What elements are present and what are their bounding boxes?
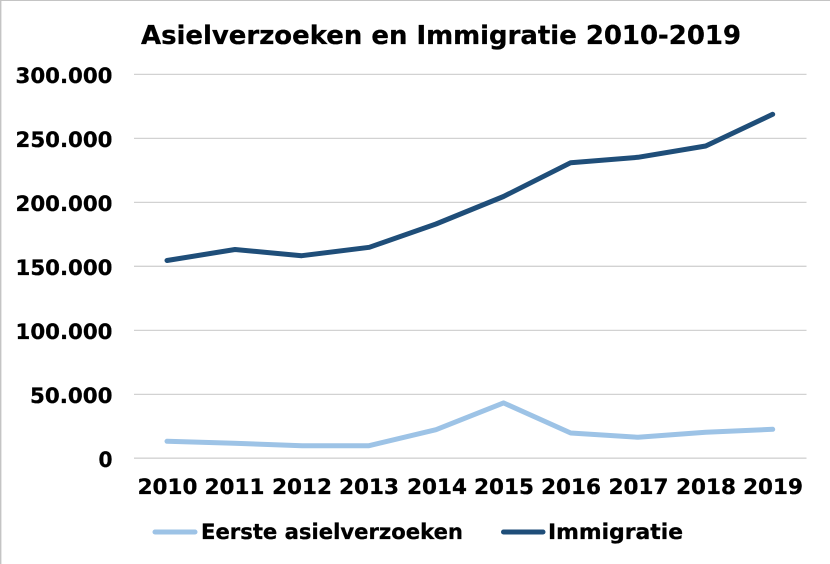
y axis labels [16, 64, 112, 473]
y axis labels: 200.000 [16, 192, 112, 217]
y axis labels: 50.000 [30, 384, 112, 409]
legend: Eerste asielverzoeken: Eerste asielverzoeken [201, 520, 463, 545]
line: Eerste asielverzoeken [167, 403, 773, 446]
y axis labels: 100.000 [16, 320, 112, 345]
y axis labels: 150.000 [16, 256, 112, 281]
x axis labels: 2018 [676, 475, 736, 500]
x axis labels: 2012 [272, 475, 332, 500]
x axis labels: 2013 [339, 475, 399, 500]
x axis labels: 2014 [407, 475, 467, 500]
title: Asielverzoeken en Immigratie 2010-2019 [141, 21, 741, 51]
legend: Immigratie: Immigratie [548, 520, 683, 545]
x axis labels [138, 475, 803, 500]
y axis labels: 0 [98, 448, 112, 473]
x axis labels: 2010 [138, 475, 197, 500]
line: Immigratie [167, 114, 773, 260]
x axis labels: 2015 [474, 475, 534, 500]
x axis labels: 2011 [205, 475, 264, 500]
y axis labels: 300.000 [16, 64, 112, 89]
x axis labels: 2019 [743, 475, 803, 500]
y axis labels: 250.000 [16, 128, 112, 153]
x axis labels: 2017 [609, 475, 668, 500]
x axis labels: 2016 [541, 475, 601, 500]
